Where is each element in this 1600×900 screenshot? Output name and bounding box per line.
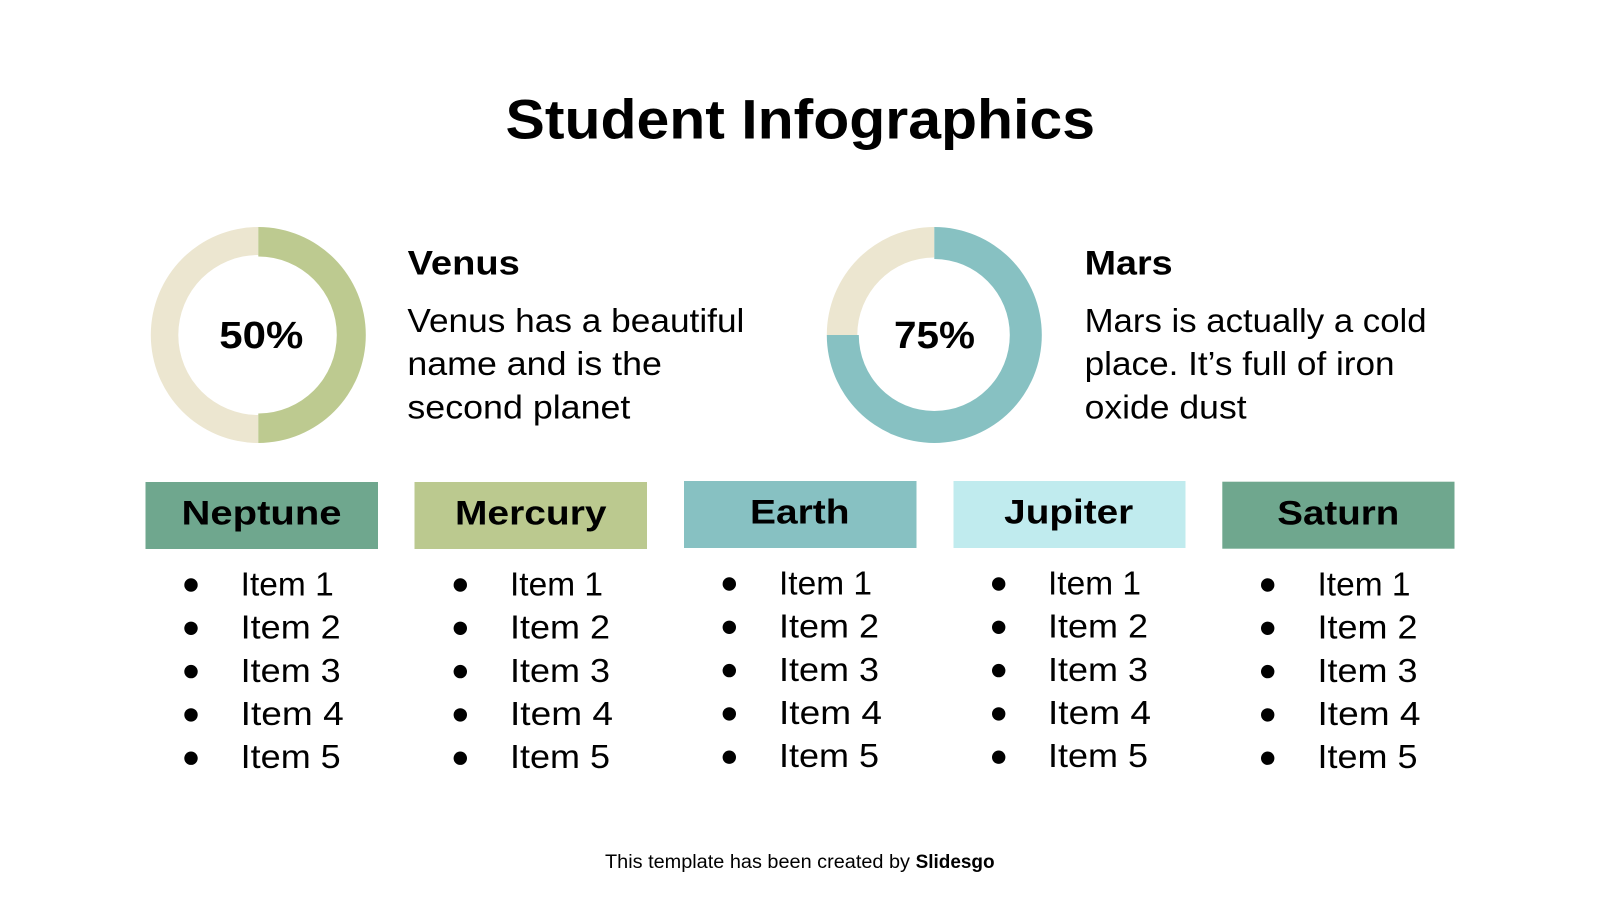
description <box>1085 302 1427 425</box>
donut chart: Venus 50% <box>151 227 366 443</box>
header: Neptune: Neptune <box>182 494 342 532</box>
description: oxide dust <box>1085 388 1247 425</box>
bullet list: Item 5 <box>241 738 341 775</box>
donut chart: Mars 75% <box>827 227 1042 443</box>
bullet list <box>454 565 613 775</box>
panel: Venus <box>151 227 744 443</box>
description <box>407 302 744 425</box>
bullet list: Item 5 <box>779 737 879 774</box>
bullet list: Item 5 <box>510 738 610 775</box>
bullet list: Item 1 <box>1318 565 1410 602</box>
header: Jupiter: Jupiter <box>1004 494 1133 532</box>
bullet list: Item 5 <box>1048 737 1148 774</box>
bullet list: Item 2 <box>510 609 610 646</box>
panel: Earth column <box>684 481 916 774</box>
bullet list: Item 2 <box>1048 608 1148 645</box>
heading: Mars <box>1085 244 1173 282</box>
donut value: 75% <box>894 315 975 357</box>
bullet list: Item 3 <box>1318 652 1418 689</box>
bullet list: Item 1 <box>779 564 872 601</box>
bullet list <box>184 565 344 775</box>
title: Student Infographics <box>506 88 1095 150</box>
panel: Saturn column <box>1222 482 1454 775</box>
bullet list: Item 4 <box>779 694 882 731</box>
donut value: 50% <box>219 315 303 357</box>
bullet list: Item 3 <box>241 652 341 689</box>
bullet list: Item 2 <box>779 608 879 645</box>
bullet list: Item 1 <box>241 565 334 602</box>
bullet list: Item 4 <box>241 695 344 732</box>
bullet list: Item 2 <box>241 609 341 646</box>
header: Jupiter <box>954 481 1186 548</box>
panel: Neptune column <box>146 482 378 775</box>
header: Mercury: Mercury <box>455 494 607 532</box>
description: Mars is actually a cold <box>1085 302 1427 339</box>
bullet list: Item 5 <box>1318 738 1418 775</box>
panel: Jupiter column <box>954 481 1186 774</box>
bullet list: Item 4 <box>1048 694 1151 731</box>
header: Saturn <box>1222 482 1454 549</box>
description: name and is the <box>407 345 662 382</box>
bullet list: Item 3 <box>779 651 879 688</box>
header: Earth: Earth <box>750 493 850 531</box>
bullet list: Item 1 <box>1048 564 1141 601</box>
header: Mercury <box>414 482 647 549</box>
bullet list <box>992 564 1151 774</box>
heading: Venus <box>408 244 520 282</box>
bullet list <box>1261 565 1420 775</box>
header: Saturn: Saturn <box>1277 494 1399 532</box>
bullet list: Item 4 <box>1318 695 1420 732</box>
panel: Mercury column <box>414 482 647 775</box>
footer credit: Slidesgo <box>916 852 995 873</box>
description: Venus has a beautiful <box>407 302 744 339</box>
bullet list: Item 2 <box>1318 609 1418 646</box>
bullet list: Item 3 <box>510 652 610 689</box>
footer credit: This template has been created by <box>605 852 911 873</box>
panel: Mars <box>827 227 1427 443</box>
description: second planet <box>407 388 630 425</box>
header: Earth <box>684 481 916 548</box>
bullet list: Item 1 <box>510 565 603 602</box>
header: Neptune <box>146 482 378 549</box>
bullet list: Item 4 <box>510 695 613 732</box>
bullet list: Item 3 <box>1048 651 1148 688</box>
bullet list <box>723 564 882 774</box>
description: place. It’s full of iron <box>1085 345 1395 382</box>
